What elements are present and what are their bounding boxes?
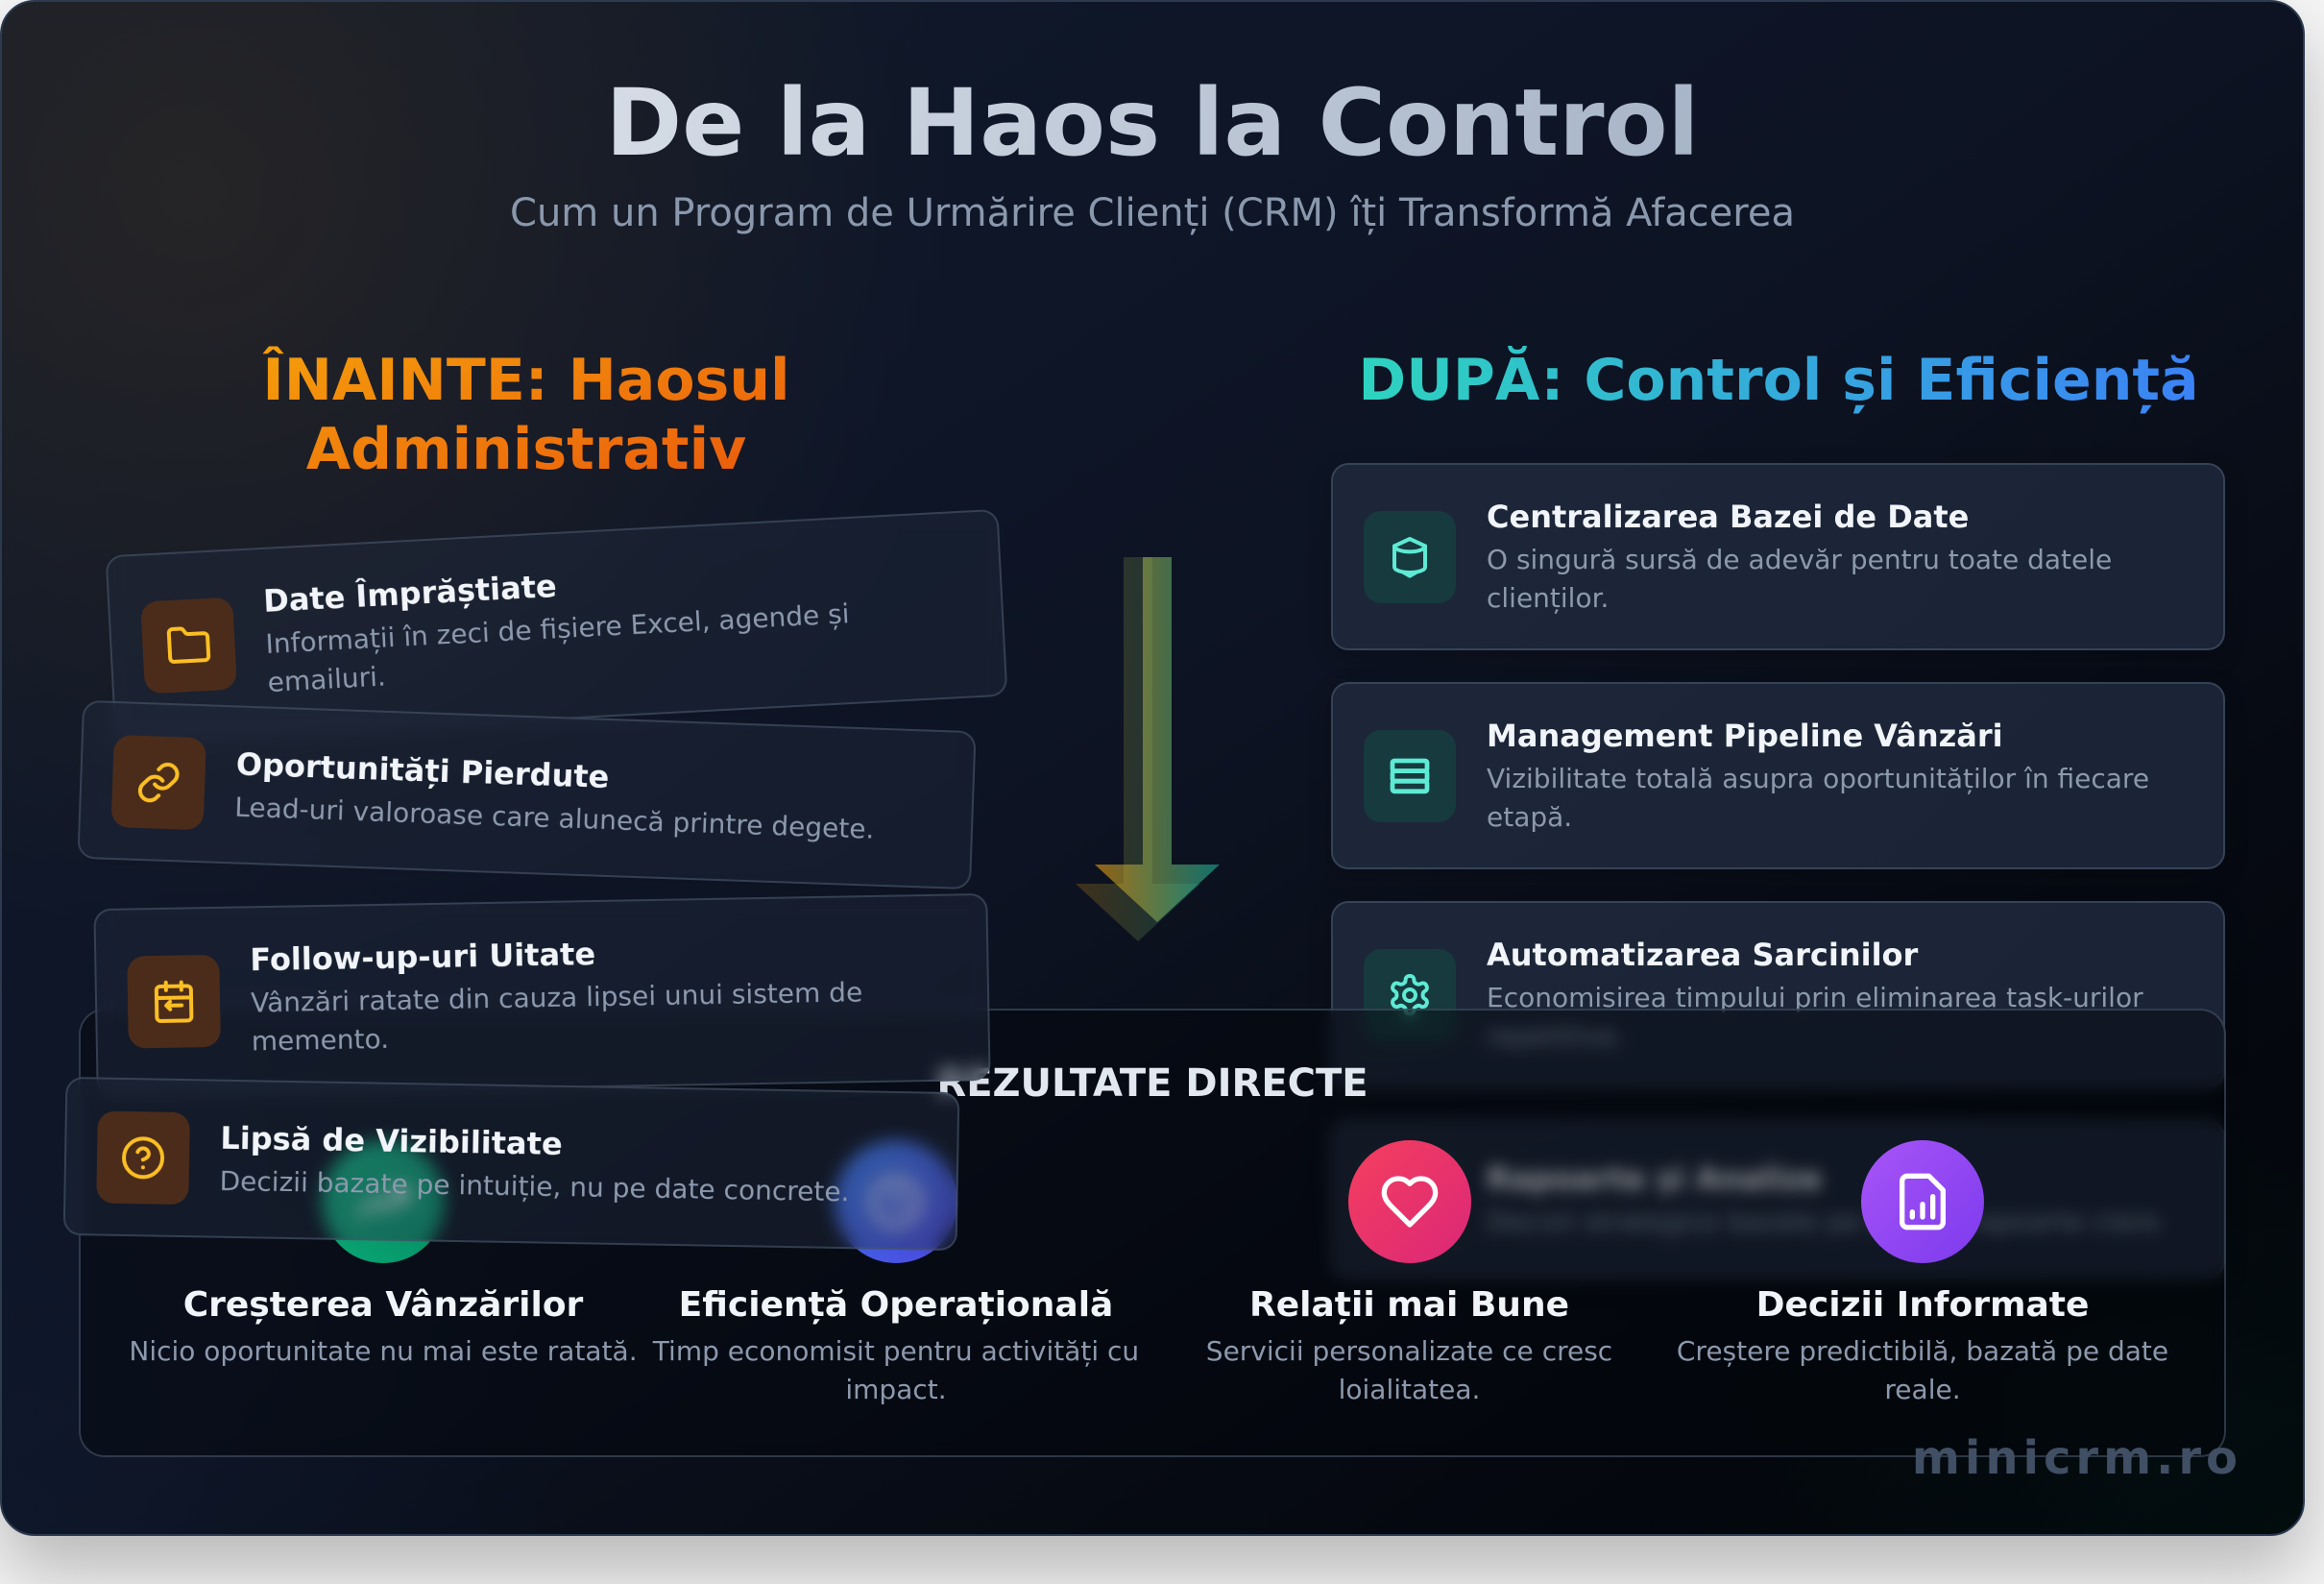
text block (219, 1120, 849, 1207)
result title: Decizii Informate (1756, 1285, 2089, 1324)
card: Rapoarte și Analize (1331, 1120, 2225, 1279)
icon: folder (140, 597, 236, 694)
icon: trending up (322, 1140, 445, 1263)
icon: database (1364, 511, 1456, 603)
text block (1487, 718, 2149, 833)
card: Centralizarea Bazei de Date (1331, 463, 2225, 650)
icon: question (95, 1110, 189, 1205)
text block: Date Împrăștiate (262, 568, 558, 620)
icon: gear (1364, 949, 1456, 1041)
result description: Timp economisit pentru activități cu impact. (653, 1335, 1139, 1405)
result: Relații mai Bune (1206, 1140, 1612, 1405)
icon: file chart (1861, 1140, 1984, 1263)
result: Eficiență Operațională (653, 1128, 1139, 1405)
text block: Oportunități Pierdute (235, 745, 610, 795)
result title: Relații mai Bune (1249, 1285, 1569, 1324)
text block: Decizii bazate pe intuiție, nu pe date concrete. (219, 1165, 849, 1207)
result description: Servicii personalizate ce cresc loialitatea. (1206, 1335, 1612, 1405)
heading: before: ÎNAINTE: Haosul (262, 347, 790, 414)
text block: O singură sursă de adevăr pentru toate datele clienților. (1487, 544, 2112, 614)
text block: Centralizarea Bazei de Date (1487, 499, 1969, 535)
text block: Vânzări ratate din cauza lipsei unui sistem de memento. (251, 976, 862, 1057)
result description: Nicio oportunitate nu mai este ratată. (129, 1335, 638, 1367)
icon: link (110, 734, 206, 829)
text block (1479, 1157, 2167, 1238)
text block: Vizibilitate totală asupra oportunităților în fiecare etapă. (1487, 763, 2149, 833)
watermark: minicrm.ro (1912, 1431, 2242, 1485)
result description: Creștere predictibilă, bazată pe date reale. (1677, 1335, 2168, 1405)
text block: Management Pipeline Vânzări (1487, 718, 2003, 754)
text block (1487, 499, 2112, 614)
card: Follow-up-uri Uitate (93, 892, 991, 1096)
icon: chart (1364, 1153, 1456, 1245)
card: Automatizarea Sarcinilor (1331, 901, 2225, 1088)
heading: before (262, 346, 790, 483)
text block: Informații în zeci de fișiere Excel, agende și emailuri. (265, 597, 850, 698)
panel: direct results (79, 1009, 2226, 1457)
text block: Lipsă de Vizibilitate (220, 1120, 562, 1162)
card: Lipsă de Vizibilitate (62, 1077, 959, 1251)
text block (234, 745, 875, 844)
text block: Rapoarte și Analize (1487, 1160, 1822, 1197)
icon: stacked rows (1364, 730, 1456, 822)
card: Date Împrăștiate (106, 509, 1007, 743)
subtitle: Cum un Program de Urmărire Clienți (CRM) îți Transformă Afacerea (510, 191, 1795, 235)
text block: Follow-up-uri Uitate (250, 936, 595, 978)
text block: Automatizarea Sarcinilor (1487, 937, 1918, 973)
result title: Eficiență Operațională (679, 1285, 1113, 1324)
title: De la Haos la Control (606, 69, 1699, 177)
heading: after: DUPĂ: Control și Eficiență (1358, 347, 2199, 414)
text block: Economisirea timpului prin eliminarea task-urilor repetitive. (1487, 982, 2143, 1052)
card: Oportunități Pierdute (77, 699, 977, 889)
result title: Creșterea Vânzărilor (183, 1285, 583, 1324)
text block: Lead-uri valoroase care alunecă printre degete. (234, 791, 875, 844)
result: Decizii Informate (1677, 1140, 2168, 1405)
icon: clock (835, 1140, 957, 1263)
text block (250, 936, 862, 1057)
heading: before: Administrativ (306, 416, 746, 483)
icon: heart (1348, 1140, 1471, 1263)
card: Management Pipeline Vânzări (1331, 682, 2225, 869)
result: Creșterea Vânzărilor (129, 1130, 638, 1367)
text block (1487, 937, 2143, 1052)
heading: results: REZULTATE DIRECTE (936, 1061, 1368, 1106)
icon: calendar (127, 954, 220, 1048)
text block: Decizii strategice bazate pe date și rapoarte clare. (1487, 1206, 2167, 1237)
